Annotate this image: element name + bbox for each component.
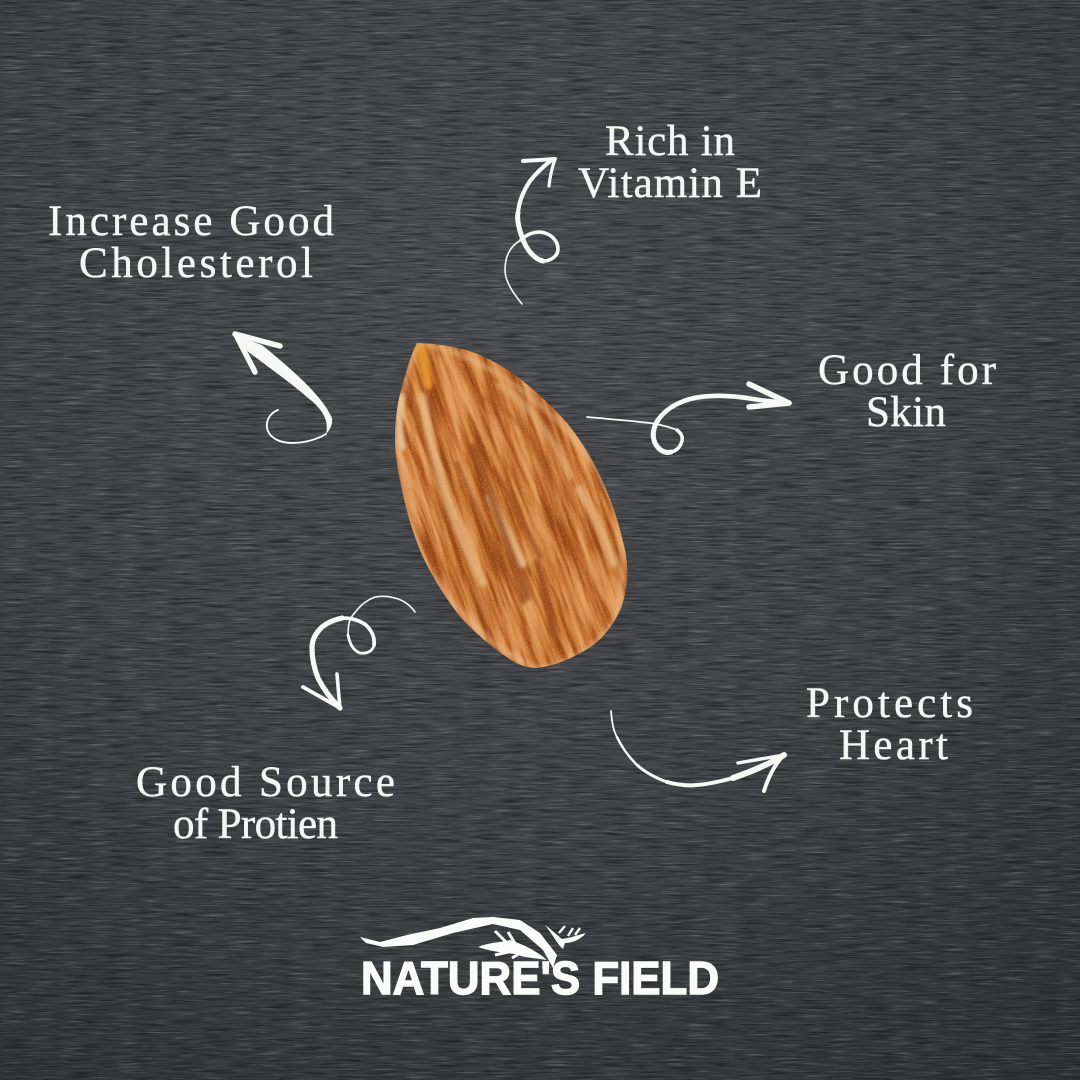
illustration: almond: [395, 343, 628, 668]
label: Increase Good Cholesterol: Cholesterol: [79, 240, 313, 287]
arrow: to Rich in Vitamin E: [505, 159, 558, 304]
arrow: to Increase Good Cholesterol: [235, 334, 332, 443]
label: Rich in Vitamin E: Rich in: [605, 118, 735, 165]
label: Good Source of Protien: [136, 759, 395, 848]
label: Protects Heart: [806, 680, 973, 769]
arrow: to Good for Skin: [587, 384, 789, 452]
label: Increase Good Cholesterol: Increase Good: [48, 198, 334, 245]
label: Increase Good Cholesterol: [48, 198, 334, 287]
logo: carrot and leaves: [360, 917, 586, 968]
arrow: to Protects Heart: [611, 711, 784, 791]
label: Good Source of Protien: of Protien: [173, 801, 338, 848]
label: Rich in Vitamin E: [578, 118, 762, 207]
label: Protects Heart: Heart: [839, 722, 948, 769]
label: Good for Skin: Skin: [866, 389, 946, 436]
label: Good for Skin: Good for: [818, 347, 996, 394]
label: Rich in Vitamin E: Vitamin E: [578, 160, 762, 207]
logo: Nature's Field: [360, 917, 719, 1004]
label: Good for Skin: [818, 347, 996, 436]
arrow: to Good Source of Protien: [303, 596, 415, 708]
label: Protects Heart: Protects: [806, 680, 973, 727]
label: Good Source of Protien: Good Source: [136, 759, 395, 806]
logo: wordmark: NATURE'S FIELD: [361, 952, 719, 1004]
